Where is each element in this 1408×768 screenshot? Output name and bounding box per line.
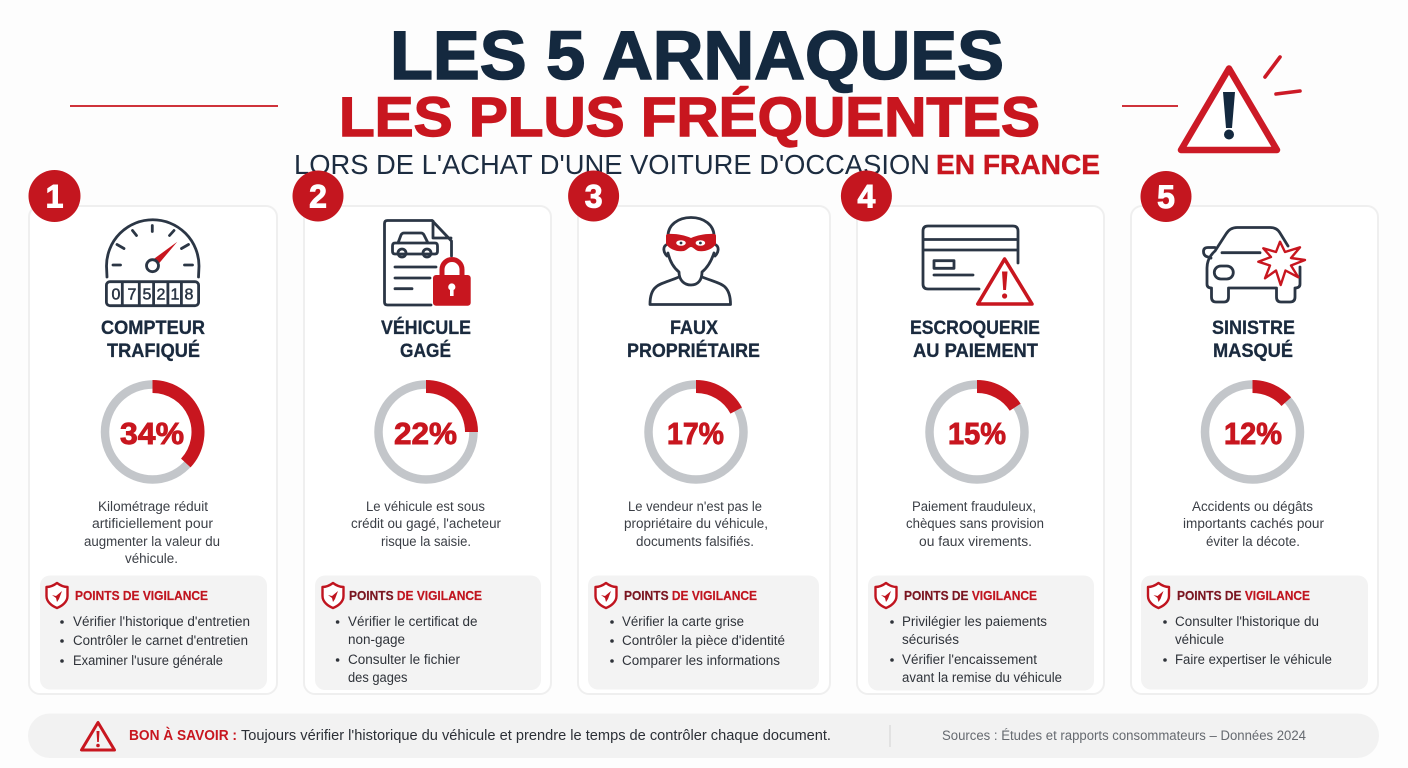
title rule left xyxy=(70,105,278,107)
icon: speedometer: 0 xyxy=(112,286,121,304)
heading: PROPRIÉTAIRE xyxy=(627,340,760,362)
footer banner xyxy=(28,714,1379,758)
description: Accidents ou dégâts xyxy=(1192,499,1313,514)
heading xyxy=(381,317,471,362)
callout: points de vigilance: avant la remise du véhicule xyxy=(902,670,1062,685)
icon: speedometer: 7 xyxy=(128,286,137,304)
callout: points de vigilance: des gages xyxy=(348,670,408,685)
icon: footer warning triangle xyxy=(82,722,114,750)
icon: speedometer: 1 xyxy=(171,286,180,304)
callout: points de vigilance: Comparer les informations xyxy=(622,653,780,668)
description xyxy=(906,499,1044,549)
callout: points de vigilance: POINTS DE VIGILANCE xyxy=(349,588,482,603)
description: crédit ou gagé, l'acheteur xyxy=(351,516,501,531)
icon: shield xyxy=(596,583,616,608)
heading: SINISTRE xyxy=(1212,318,1295,339)
callout: points de vigilance xyxy=(40,576,267,690)
icon: shield xyxy=(876,583,896,608)
donut chart: 34% xyxy=(105,384,200,480)
description: documents falsifiés. xyxy=(636,534,754,549)
icon: damaged car xyxy=(1204,228,1305,302)
description xyxy=(351,499,501,549)
heading xyxy=(1212,318,1295,362)
heading xyxy=(627,318,760,362)
badge 2: 2 xyxy=(309,178,327,214)
description: véhicule. xyxy=(125,551,178,566)
callout: points de vigilance: Contrôler la pièce d'identité xyxy=(622,633,785,648)
callout: points de vigilance: Consulter l'historique du xyxy=(1175,614,1319,629)
donut chart: 12%: 12% xyxy=(1224,416,1282,451)
callout: points de vigilance: Vérifier l'encaissement xyxy=(902,652,1037,667)
callout: points de vigilance: non-gage xyxy=(348,632,405,647)
icon: speedometer: 8 xyxy=(185,286,194,304)
icon: speedometer xyxy=(106,220,199,306)
panel: véhicule gagé xyxy=(292,170,551,694)
icon: warning triangle xyxy=(1181,57,1300,150)
tip text: BON À SAVOIR : xyxy=(129,727,237,744)
callout: points de vigilance: POINTS DE VIGILANCE xyxy=(624,588,757,603)
callout: points de vigilance: Examiner l'usure générale xyxy=(73,653,223,668)
donut chart: 15%: 15% xyxy=(948,416,1006,451)
description: Kilométrage réduit xyxy=(98,499,208,514)
description xyxy=(84,499,220,566)
sources: Sources : Études et rapports consommateurs – Données 2024 xyxy=(942,728,1306,743)
title rule right xyxy=(1122,105,1178,107)
badge 3 xyxy=(568,170,619,222)
heading xyxy=(101,318,205,362)
badge 1 xyxy=(28,170,80,222)
description: risque la saisie. xyxy=(381,534,471,549)
callout: points de vigilance: POINTS DE VIGILANCE xyxy=(75,588,208,603)
panel: compteur trafiqué xyxy=(28,170,277,694)
callout: points de vigilance xyxy=(1141,576,1368,690)
callout: points de vigilance xyxy=(588,576,819,690)
description: Le vendeur n'est pas le xyxy=(628,499,762,514)
donut chart: 15% xyxy=(930,384,1024,480)
badge 5 xyxy=(1140,171,1192,222)
badge 4: 4 xyxy=(858,178,876,214)
callout: points de vigilance: Vérifier le certificat de xyxy=(348,614,478,629)
panel: escroquerie au paiement xyxy=(841,170,1104,694)
callout: points de vigilance: POINTS DE VIGILANCE xyxy=(904,588,1037,603)
icon: shield xyxy=(322,583,344,608)
description: artificiellement pour xyxy=(92,516,214,531)
description: augmenter la valeur du xyxy=(84,534,220,549)
description: propriétaire du véhicule, xyxy=(624,516,768,531)
heading: TRAFIQUÉ xyxy=(107,340,200,362)
icon: bank card with warning xyxy=(923,226,1032,304)
title: LES 5 ARNAQUES xyxy=(390,17,1004,94)
icon: masked person xyxy=(650,218,730,304)
callout: points de vigilance: Vérifier l'historique d'entretien xyxy=(73,614,250,629)
description: éviter la décote. xyxy=(1206,534,1300,549)
heading: VÉHICULE xyxy=(381,317,471,339)
description xyxy=(1183,499,1324,549)
callout: points de vigilance: Contrôler le carnet d'entretien xyxy=(73,633,248,648)
callout: points de vigilance: Vérifier la carte grise xyxy=(622,614,744,629)
badge 2 xyxy=(292,170,344,222)
callout: points de vigilance xyxy=(868,576,1094,690)
callout: points de vigilance: Faire expertiser le véhicule xyxy=(1175,652,1332,667)
icon: shield xyxy=(46,583,68,608)
description: chèques sans provision xyxy=(906,516,1044,531)
description: importants cachés pour xyxy=(1183,516,1324,531)
callout: points de vigilance: sécurisés xyxy=(902,632,959,647)
donut chart: 17%: 17% xyxy=(667,416,724,451)
heading: ESCROQUERIE xyxy=(910,318,1040,339)
icon: speedometer: 5 xyxy=(143,286,152,304)
callout: points de vigilance: Consulter le fichier xyxy=(348,652,461,667)
icon: speedometer: 2 xyxy=(157,286,166,304)
heading: AU PAIEMENT xyxy=(913,341,1038,362)
description: Le véhicule est sous xyxy=(366,499,485,514)
heading: GAGÉ xyxy=(400,340,451,362)
tip text: Toujours vérifier l'historique du véhicule et prendre le temps de contrôler chaque document. xyxy=(241,728,831,744)
heading: MASQUÉ xyxy=(1213,340,1293,362)
heading: FAUX xyxy=(670,318,718,339)
donut chart: 22%: 22% xyxy=(394,416,457,451)
description xyxy=(624,499,768,549)
subtitle: EN FRANCE xyxy=(936,149,1100,180)
title: LES PLUS FRÉQUENTES xyxy=(339,85,1040,148)
icon: document and padlock xyxy=(384,220,471,306)
donut chart: 22% xyxy=(378,384,474,480)
title xyxy=(339,17,1040,148)
panel: faux propriétaire xyxy=(568,170,830,694)
badge 1: 1 xyxy=(46,178,63,214)
donut chart: 12% xyxy=(1205,384,1300,480)
subtitle: LORS DE L'ACHAT D'UNE VOITURE D'OCCASION xyxy=(294,149,930,180)
badge 5: 5 xyxy=(1157,179,1175,215)
donut chart: 17% xyxy=(648,384,744,480)
description: Paiement frauduleux, xyxy=(912,499,1036,514)
panel: sinistre masqué xyxy=(1131,171,1378,694)
icon: shield xyxy=(1148,583,1169,608)
callout: points de vigilance: POINTS DE VIGILANCE xyxy=(1177,588,1310,603)
callout: points de vigilance: véhicule xyxy=(1175,632,1224,647)
description: ou faux virements. xyxy=(919,534,1032,549)
heading xyxy=(910,318,1040,362)
callout: points de vigilance xyxy=(315,576,541,690)
donut chart: 34%: 34% xyxy=(120,416,184,451)
callout: points de vigilance: Privilégier les paiements xyxy=(902,614,1047,629)
badge 4 xyxy=(841,170,892,222)
badge 3: 3 xyxy=(585,178,602,214)
heading: COMPTEUR xyxy=(101,318,205,339)
